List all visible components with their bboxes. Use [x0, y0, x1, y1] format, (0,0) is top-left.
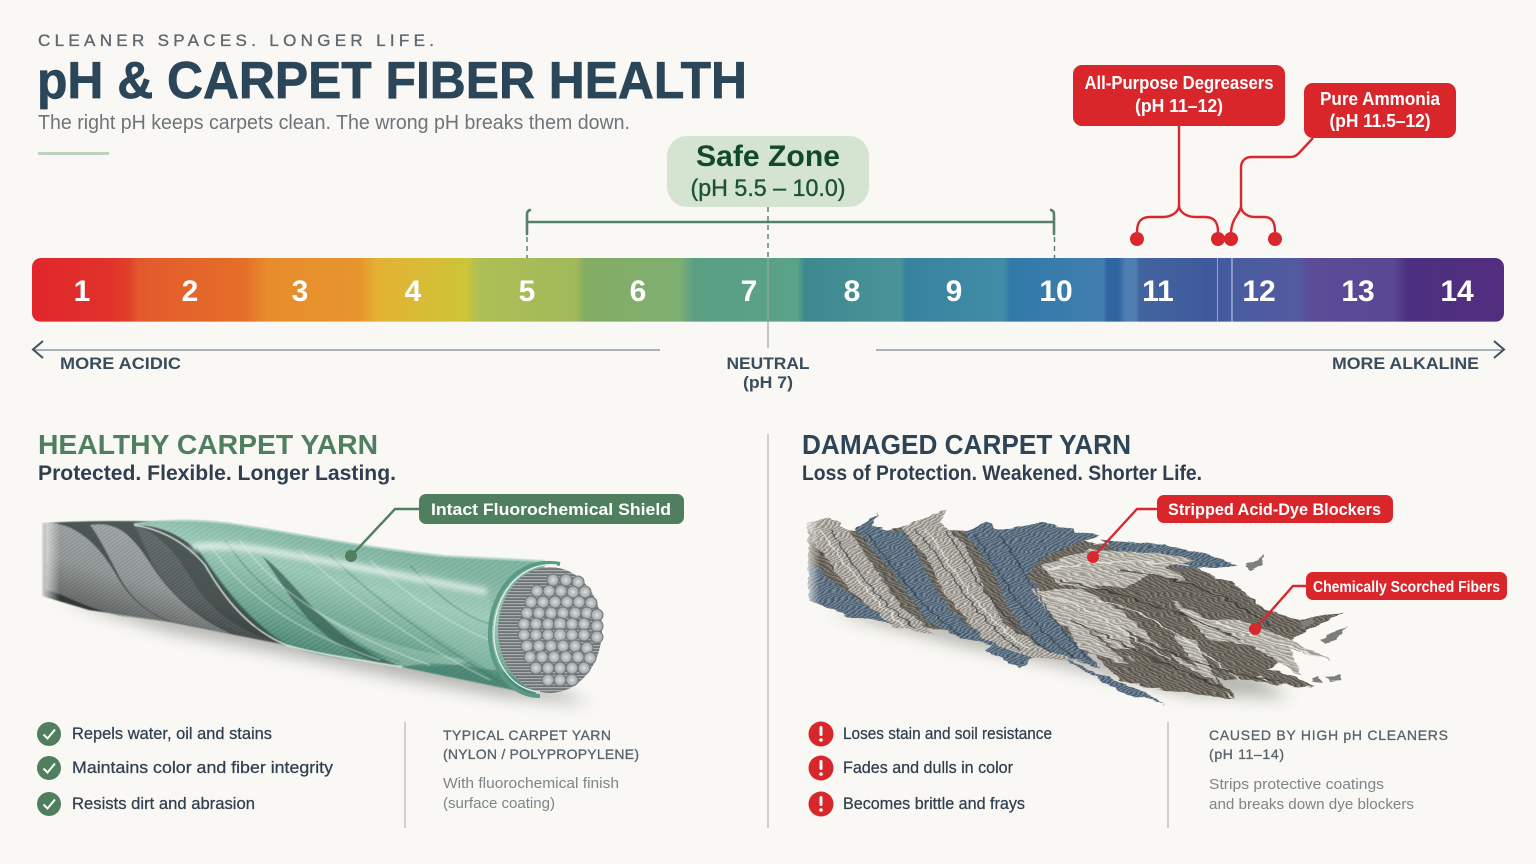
problem: brittle and frays	[808, 792, 1025, 816]
problem: loses stain resistance: Loses stain and soil resistance	[843, 724, 1052, 743]
alkaline direction arrow	[876, 341, 1504, 373]
benefit: maintains color: Maintains color and fiber integrity	[72, 758, 334, 777]
callout: all-purpose degreasers: All-Purpose Degreasers	[1084, 73, 1274, 93]
scale numbers: 5	[519, 275, 535, 308]
scorched frayed shards	[1030, 550, 1344, 698]
scale numbers: 2	[182, 275, 198, 308]
note: typical carpet yarn: TYPICAL CARPET YARN	[443, 727, 611, 743]
note: caused by high pH cleaners: (pH 11–14)	[1209, 746, 1284, 762]
acidic direction arrow	[33, 341, 660, 373]
note: caused by high pH cleaners: Strips protective coatings	[1209, 776, 1384, 793]
scale numbers: 9	[946, 275, 962, 308]
note: caused by high pH cleaners: CAUSED BY HIGH pH CLEANERS	[1209, 727, 1448, 743]
pH scale bar	[32, 258, 1504, 322]
problem: fades and dulls: Fades and dulls in color	[843, 758, 1013, 777]
benefit: maintains color	[37, 756, 334, 780]
scale numbers: 12	[1242, 275, 1276, 308]
illustration: frayed yarn	[802, 508, 1347, 704]
scale numbers: 6	[630, 275, 646, 308]
problems list	[808, 722, 1052, 816]
loose fiber fragments	[1245, 555, 1347, 682]
label: stripped acid-dye blockers	[1087, 495, 1393, 563]
problem: fades and dulls	[808, 756, 1013, 780]
safe zone badge: (pH 5.5 – 10.0)	[690, 175, 846, 202]
panel: healthy carpet yarn	[37, 429, 684, 828]
safe zone bracket	[527, 207, 1054, 258]
neutral label: (pH 7)	[743, 373, 793, 392]
eyebrow tagline: CLEANER SPACES. LONGER LIFE.	[38, 31, 434, 50]
benefit: repels water	[37, 722, 272, 746]
benefit: resists dirt: Resists dirt and abrasion	[72, 794, 255, 813]
pale twisted strands	[808, 508, 1085, 662]
note: typical carpet yarn	[443, 727, 639, 812]
scale numbers	[74, 275, 1474, 308]
subtitle: The right pH keeps carpets clean. The wrong pH breaks them down.	[38, 112, 630, 134]
callout: all-purpose degreasers	[1073, 65, 1285, 246]
scale numbers: 7	[741, 275, 757, 308]
problem: loses stain resistance	[808, 722, 1052, 746]
scale numbers: 3	[292, 275, 308, 308]
neutral tick line	[767, 258, 769, 348]
scale numbers: 8	[844, 275, 860, 308]
problem: brittle and frays: Becomes brittle and frays	[843, 794, 1025, 813]
scale numbers: 14	[1440, 275, 1474, 308]
benefit: resists dirt	[37, 792, 255, 816]
green fluorochemical sheath	[134, 520, 545, 695]
note: caused by high pH cleaners	[1209, 727, 1448, 813]
label: more alkaline: MORE ALKALINE	[1332, 354, 1479, 373]
callout: pure ammonia	[1224, 83, 1456, 246]
scale numbers: 4	[405, 275, 422, 308]
healthy subheading: Protected. Flexible. Longer Lasting.	[38, 462, 396, 485]
label: chemically scorched fibers: Chemically Scorched Fibers	[1313, 579, 1500, 596]
sheath fiber lines	[210, 540, 500, 682]
safe zone badge	[667, 136, 869, 207]
label: intact fluorochemical shield	[345, 494, 684, 562]
callout: pure ammonia: (pH 11.5–12)	[1330, 111, 1430, 131]
label: stripped acid-dye blockers: Stripped Acid-Dye Blockers	[1168, 500, 1381, 519]
benefits list	[37, 722, 334, 816]
scale numbers: 10	[1039, 275, 1073, 308]
illustration: intact yarn	[38, 515, 603, 704]
header block	[37, 31, 747, 155]
damaged heading: DAMAGED CARPET YARN	[802, 429, 1131, 460]
neutral label: NEUTRAL	[726, 354, 810, 373]
blue-grey strands	[808, 514, 1238, 704]
label: chemically scorched fibers	[1249, 572, 1507, 635]
individual fiber lines	[820, 528, 1320, 690]
neutral label	[726, 354, 810, 392]
callout: all-purpose degreasers: (pH 11–12)	[1135, 96, 1223, 116]
center divider	[767, 434, 769, 828]
scale numbers: 13	[1341, 275, 1375, 308]
accent rule	[38, 152, 109, 155]
benefit: repels water: Repels water, oil and stains	[72, 724, 272, 743]
panel: damaged carpet yarn	[802, 429, 1507, 828]
note: typical carpet yarn: (surface coating)	[443, 795, 555, 812]
damaged subheading: Loss of Protection. Weakened. Shorter Life.	[802, 462, 1202, 485]
safe zone badge: Safe Zone	[696, 140, 840, 173]
scale numbers: 1	[74, 275, 90, 308]
note: typical carpet yarn: (NYLON / POLYPROPYLENE)	[443, 746, 639, 762]
label: more acidic: MORE ACIDIC	[60, 354, 181, 373]
main title: pH & CARPET FIBER HEALTH	[37, 52, 747, 110]
note: caused by high pH cleaners: and breaks down dye blockers	[1209, 796, 1414, 813]
twisted grey strands	[42, 521, 300, 645]
yarn cut face	[490, 563, 603, 696]
safe zone callout	[527, 136, 1054, 258]
healthy heading: HEALTHY CARPET YARN	[38, 429, 378, 460]
label: intact fluorochemical shield: Intact Fluorochemical Shield	[431, 500, 671, 519]
scale numbers: 11	[1142, 275, 1174, 308]
frayed fiber body	[808, 524, 1290, 680]
callout: pure ammonia: Pure Ammonia	[1320, 89, 1441, 109]
note: typical carpet yarn: With fluorochemical finish	[443, 775, 619, 792]
